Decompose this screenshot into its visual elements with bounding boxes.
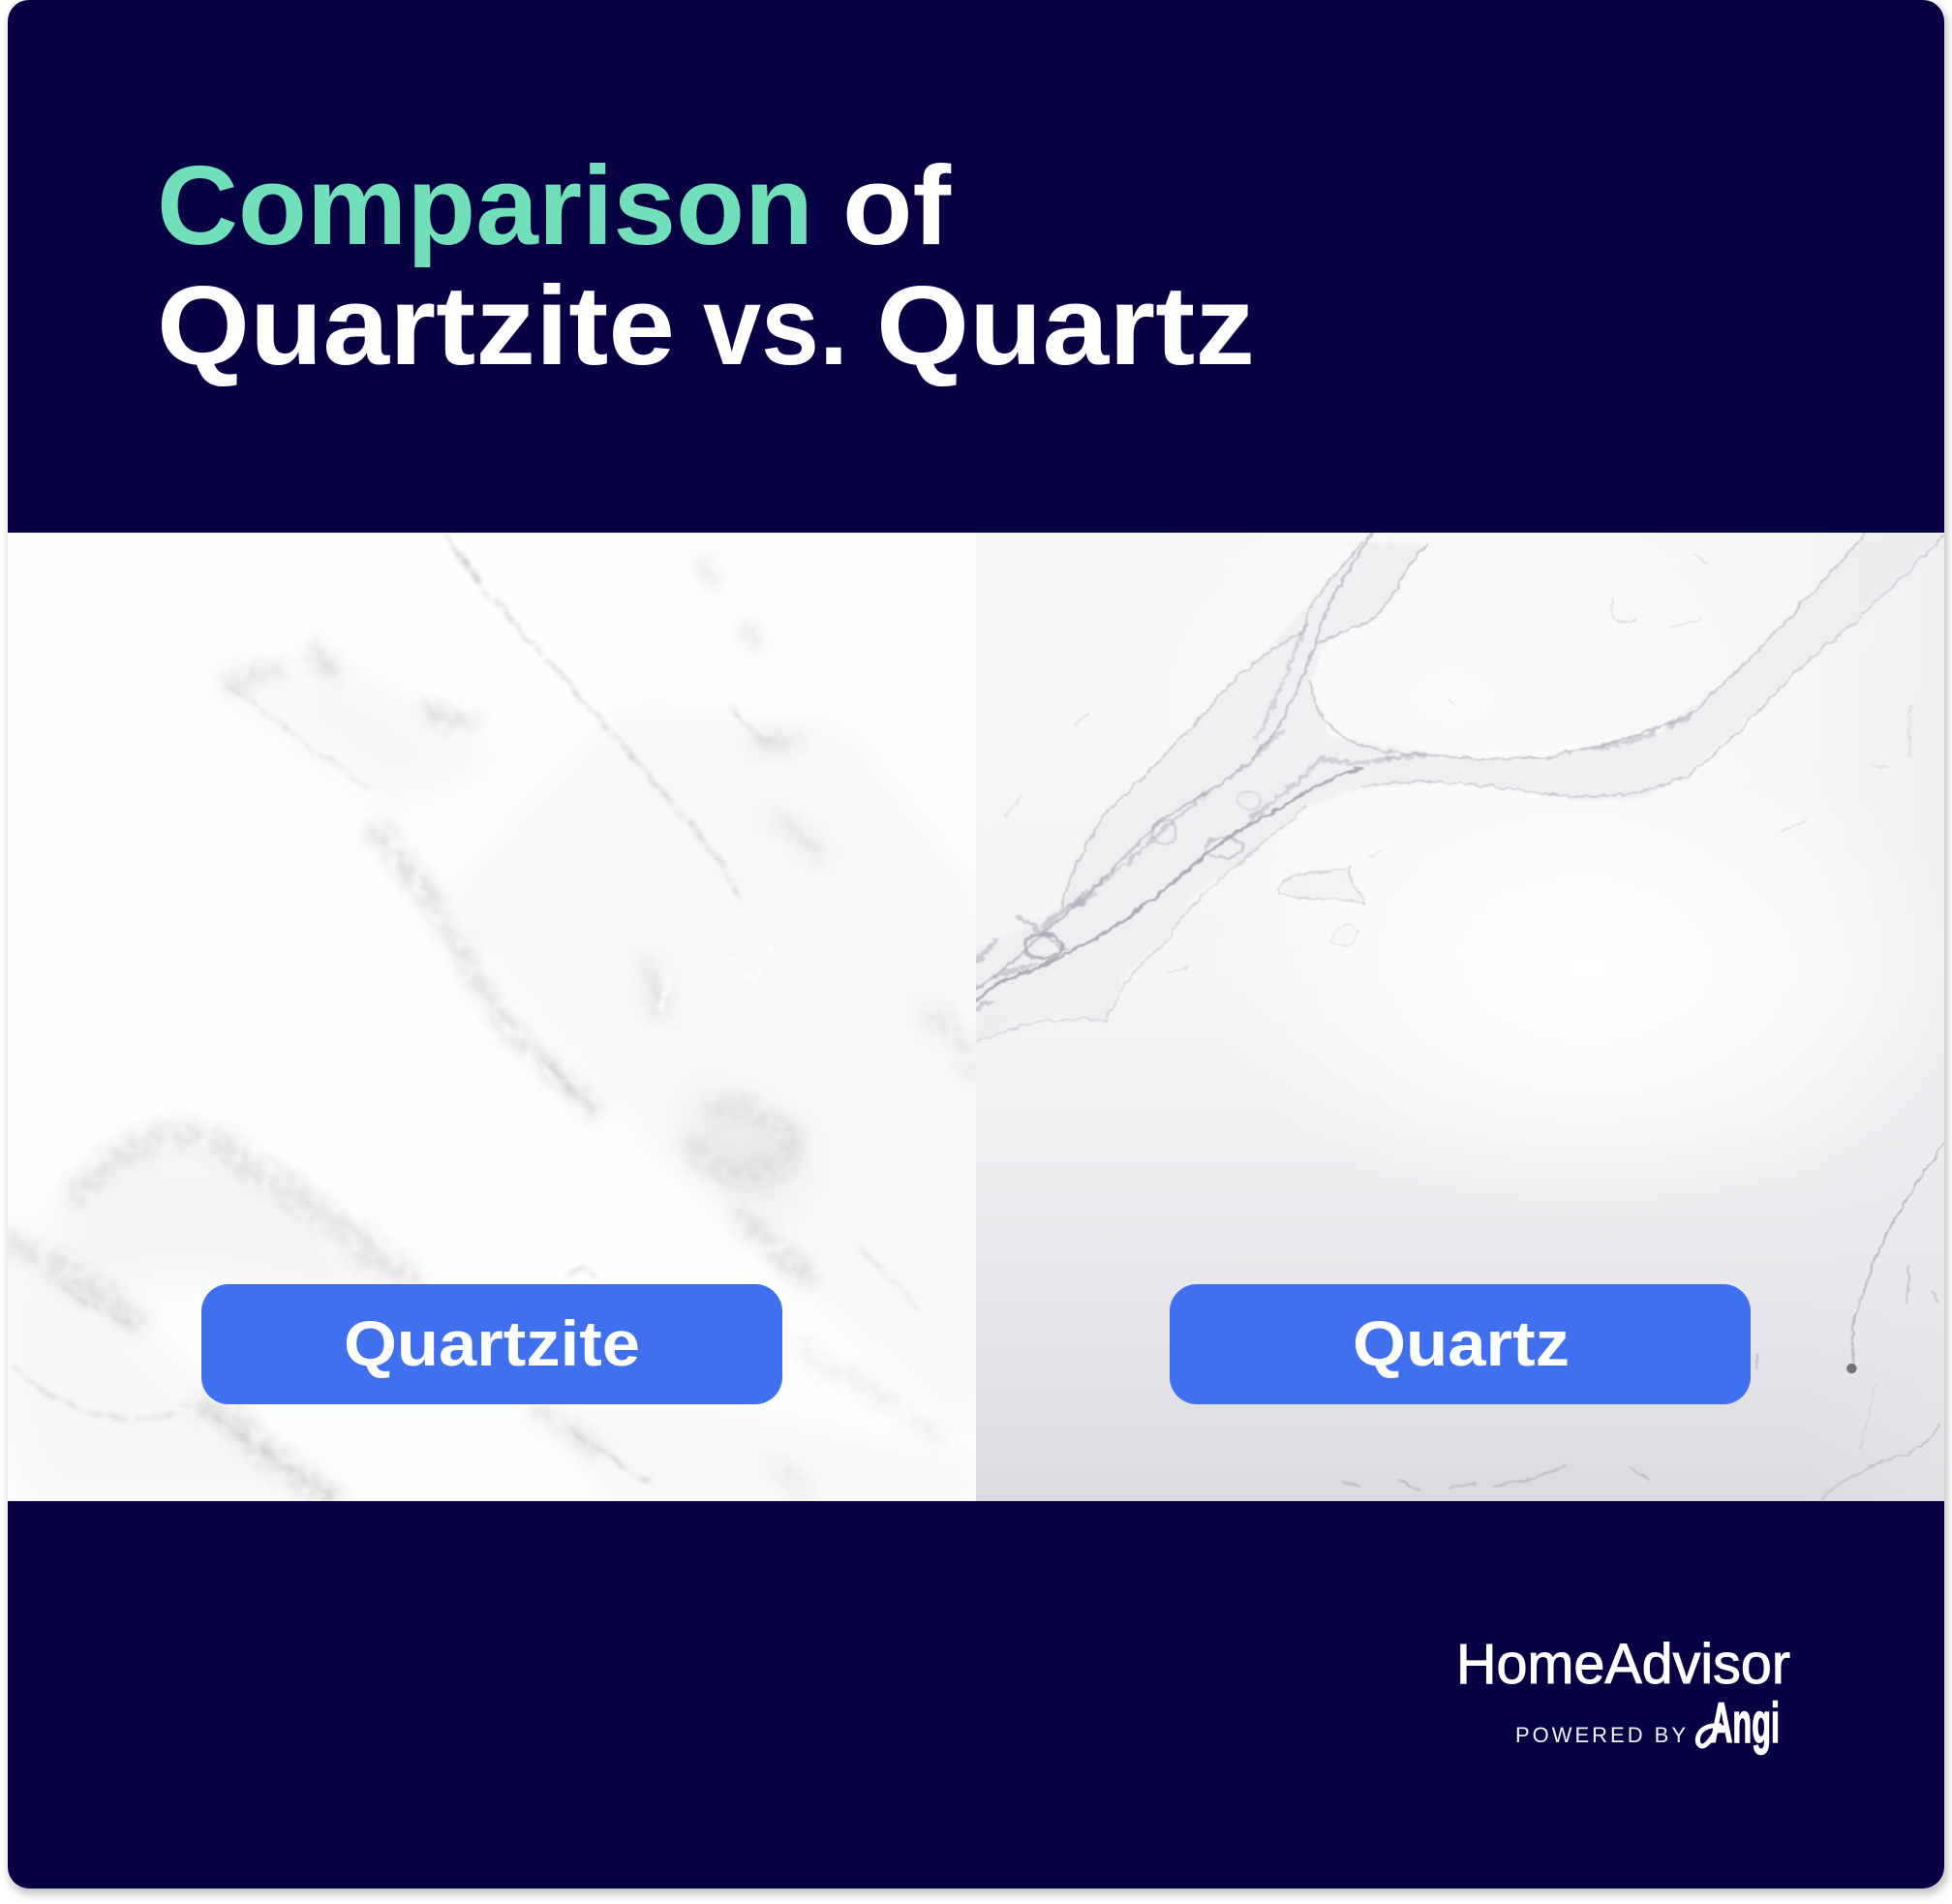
dark speck — [1846, 1364, 1857, 1373]
label: Quartz — [1170, 1284, 1751, 1404]
light vein band — [1146, 544, 1784, 866]
title — [157, 142, 1255, 388]
title: Quartz — [876, 262, 1255, 388]
title: vs. — [703, 262, 848, 388]
title: of — [842, 142, 951, 268]
label: Quartz: Quartz — [1353, 1307, 1570, 1379]
panel: quartzite marble photo — [0, 533, 978, 1506]
panel: quartz marble photo — [974, 533, 1947, 1501]
label: Quartzite — [201, 1284, 782, 1404]
label: Quartzite: Quartzite — [344, 1307, 640, 1379]
logo: HomeAdvisor powered by Angi: Angi — [1710, 1692, 1780, 1755]
title: Comparison — [157, 142, 813, 268]
logo: HomeAdvisor powered by Angi — [1456, 1633, 1790, 1755]
title: Quartzite — [157, 262, 675, 388]
logo: HomeAdvisor powered by Angi: POWERED BY — [1515, 1723, 1686, 1747]
logo: HomeAdvisor powered by Angi: HomeAdvisor — [1456, 1633, 1790, 1696]
